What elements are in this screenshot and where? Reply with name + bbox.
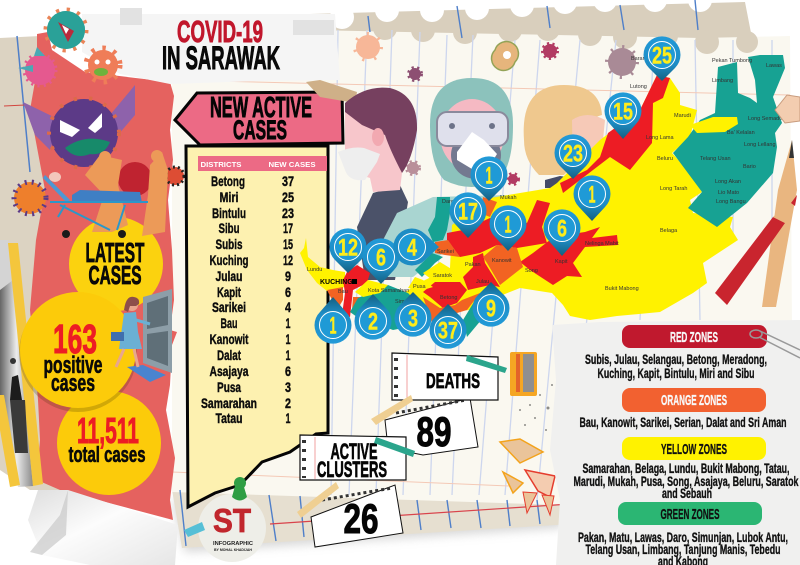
illustration: health worker in goggles xyxy=(383,78,525,277)
positive cases badge: 163 xyxy=(53,316,97,362)
pin: Betong 37: 37 xyxy=(438,318,458,344)
pin: Bau 1: 1 xyxy=(330,312,336,340)
district rows: 1 xyxy=(286,331,291,347)
map place labels: Bario xyxy=(743,164,756,170)
map place labels: Long Akan xyxy=(715,179,741,185)
title: COVID-19 xyxy=(177,14,263,49)
icon: safety pin xyxy=(750,330,800,358)
district rows: Sarikei xyxy=(212,299,246,315)
icon: pencils xyxy=(715,140,797,307)
district rows: Dalat xyxy=(217,347,241,363)
legend: yellow zones xyxy=(574,437,799,501)
district rows: 4 xyxy=(285,299,291,315)
icon: faint viruses on notebook xyxy=(356,35,636,184)
illustration: masked man xyxy=(338,88,417,280)
pin: Pusa 3 xyxy=(394,292,432,337)
pin: Samarahan 2: 2 xyxy=(368,308,378,336)
map place labels: Lawas xyxy=(766,63,782,69)
map place labels: Kapit xyxy=(555,259,568,265)
pin: Subis 15 xyxy=(604,92,642,139)
legend: red zones xyxy=(585,325,767,381)
pin: Sarikei 4: 4 xyxy=(407,234,417,262)
logo: ST infographic badge: ST xyxy=(213,502,251,539)
district rows: Asajaya xyxy=(210,363,249,379)
legend: orange zones xyxy=(580,388,786,430)
logo: ST infographic badge: INFOGRAPHIC xyxy=(213,541,253,547)
district rows: 6 xyxy=(285,363,291,379)
pin: Bintulu 23: 23 xyxy=(563,140,583,168)
map place labels: Mukah xyxy=(500,195,517,201)
pin: Pusa 3: 3 xyxy=(408,306,418,332)
logo: ST infographic badge: BY MOHAL KHADIJAH xyxy=(214,548,252,552)
map place labels: Lundu xyxy=(307,267,322,273)
zone: Lundu xyxy=(300,238,345,291)
map place labels: Telang Usan xyxy=(700,156,731,162)
district rows: 6 xyxy=(285,284,291,300)
legend: yellow zones: YELLOW ZONES xyxy=(661,441,727,458)
pin: Bau 1 xyxy=(314,297,351,344)
district rows: Sibu xyxy=(218,220,240,236)
district rows: Bau xyxy=(220,315,238,331)
panel: deaths note: 89 xyxy=(416,408,452,455)
map place labels: Long Lama xyxy=(646,135,674,141)
map place labels: Daro xyxy=(442,199,454,205)
location pins xyxy=(314,36,680,349)
district rows: 12 xyxy=(283,252,293,268)
pin: Julau 9: 9 xyxy=(486,296,496,322)
total cases badge: total cases xyxy=(68,442,146,467)
zone: orange regions xyxy=(327,197,523,323)
pin: Miri 25: 25 xyxy=(652,42,672,70)
map place labels: Pakan xyxy=(465,262,481,268)
latest cases badge xyxy=(69,217,163,311)
district rows: 37 xyxy=(282,173,294,189)
pin: Kapit 6: 6 xyxy=(557,216,567,242)
pin: Asajaya 6 xyxy=(362,238,400,284)
pin: Bintulu 23 xyxy=(554,134,592,179)
icon: woman at door xyxy=(111,289,172,382)
pin: Sibu 17: 17 xyxy=(458,198,478,226)
logo: ST infographic badge xyxy=(184,477,266,562)
district rows: 25 xyxy=(282,189,294,205)
district rows: 17 xyxy=(283,220,293,236)
pin: Betong 37 xyxy=(430,304,466,349)
red torn paper xyxy=(30,32,177,520)
map place labels: Belaga xyxy=(660,228,678,234)
pin: Kapit 6 xyxy=(544,209,580,256)
banner: new active cases: NEW ACTIVE xyxy=(210,92,312,124)
district rows: Pusa xyxy=(217,379,241,395)
district rows: 23 xyxy=(282,205,294,221)
district rows: Kuching xyxy=(210,252,248,268)
banner: new active cases: CASES xyxy=(233,115,287,145)
icon: stretcher with health workers xyxy=(43,150,168,238)
panel: deaths note xyxy=(371,353,507,455)
tape on banner xyxy=(306,80,357,103)
map place labels: Lio Mato xyxy=(718,190,739,196)
icon: virus illustrations xyxy=(14,11,184,214)
district rows: Subis xyxy=(216,236,243,252)
icon: pencil shavings xyxy=(500,95,800,515)
map place labels: Nelinga Mabit xyxy=(585,241,619,247)
cutter knife xyxy=(0,240,43,487)
map place labels: Song xyxy=(525,268,538,274)
map place labels: Sarikei xyxy=(437,249,454,255)
district rows: 3 xyxy=(285,379,291,395)
map place labels: Long Lellang xyxy=(744,142,776,148)
pin: Subis 15: 15 xyxy=(613,98,633,126)
district rows: Miri xyxy=(220,189,238,205)
pin: Kanowit 1: 1 xyxy=(504,212,512,238)
map place labels: Pekan Tumbong xyxy=(712,58,752,64)
map place labels: Kota Samarahan xyxy=(368,288,409,294)
latest cases badge: LATEST xyxy=(86,237,144,268)
icon: pencil sharpener xyxy=(510,352,537,396)
zone: teal east xyxy=(673,55,785,227)
panel: district table xyxy=(186,146,328,507)
district rows: Bintulu xyxy=(212,205,246,221)
pin: Sibu 17 xyxy=(450,192,487,238)
panel: active clusters note xyxy=(297,435,415,547)
latest cases badge: CASES xyxy=(88,260,142,290)
table header: NEW CASES xyxy=(268,160,316,169)
map place labels: Betong xyxy=(440,295,457,301)
zone: teal west xyxy=(350,197,487,337)
panel: active clusters note: ACTIVE xyxy=(330,439,378,464)
map place labels: Pusa xyxy=(413,284,426,290)
legend: green zones: GREEN ZONES xyxy=(660,506,720,523)
panel: active clusters note: 26 xyxy=(344,495,378,542)
map place labels: Bau xyxy=(338,289,348,295)
table header: DISTRICTS xyxy=(200,160,242,169)
map place labels: Long Semado xyxy=(748,116,782,122)
map place labels: Saratok xyxy=(433,273,452,279)
legend: orange zones: ORANGE ZONES xyxy=(661,392,727,409)
district rows: Kanowit xyxy=(210,331,249,347)
table header xyxy=(198,156,327,171)
map place labels: KUCHING xyxy=(320,279,353,286)
pin: Sarikei 4 xyxy=(393,229,439,266)
positive cases badge: positive xyxy=(44,352,102,379)
district rows: 15 xyxy=(283,236,293,252)
zone: yellow coast details xyxy=(355,257,473,297)
pin: Kuching 12 xyxy=(330,228,366,273)
district rows: 1 xyxy=(286,315,291,331)
legend: red zones: RED ZONES xyxy=(670,329,718,346)
total cases badge: 11,511 xyxy=(77,410,139,451)
paper curl bottom left xyxy=(28,490,178,565)
map place labels: Lutong xyxy=(630,84,647,90)
pin: Samarahan 2 xyxy=(355,294,392,340)
district rows xyxy=(201,173,294,426)
map place labels: Bukit Mabong xyxy=(605,286,639,292)
pin: Asajaya 6: 6 xyxy=(376,244,386,272)
panel: torn zone legend paper xyxy=(550,320,800,565)
district rows: Kapit xyxy=(217,284,241,300)
title strip xyxy=(82,8,340,84)
pin: Kanowit 1 xyxy=(490,205,526,251)
legend: yellow zones: and Sebauh xyxy=(662,486,712,501)
map place labels: Julau xyxy=(476,279,489,285)
positive cases badge: cases xyxy=(51,370,95,397)
panel: deaths note: DEATHS xyxy=(426,370,480,393)
pin: Miri 25 xyxy=(644,36,680,81)
map place labels: Beluru xyxy=(657,156,673,162)
map of Sarawak xyxy=(300,55,785,337)
banner: new active cases xyxy=(175,92,343,145)
illustration: blonde woman xyxy=(524,85,605,188)
district rows: 1 xyxy=(286,347,291,363)
map place labels: Limbang xyxy=(712,78,733,84)
pin: Tatau 1: 1 xyxy=(588,182,596,208)
map place labels: Marudi xyxy=(674,113,691,119)
zone: red regions xyxy=(342,75,670,317)
map place labels: Baram xyxy=(631,56,648,62)
district rows: Betong xyxy=(211,173,245,189)
map place labels: Ba' Kelalan xyxy=(727,130,755,136)
pin: Julau 9 xyxy=(473,282,510,327)
map place labels: Kanowit xyxy=(492,258,512,264)
map place labels: Simunjan xyxy=(395,299,418,305)
district rows: Julau xyxy=(216,268,242,284)
legend: green zones xyxy=(578,502,788,565)
title xyxy=(162,14,280,76)
district rows: 2 xyxy=(285,395,291,411)
district rows: 1 xyxy=(286,410,291,426)
district rows: Samarahan xyxy=(201,395,257,411)
title: IN SARAWAK xyxy=(162,40,280,76)
district rows: 9 xyxy=(285,268,291,284)
zone: yellow regions xyxy=(400,75,738,320)
pin: Dalat 1: 1 xyxy=(486,162,492,190)
icon: green push pin xyxy=(232,477,247,500)
map place labels: Long Tarah xyxy=(660,186,687,192)
district rows: Tatau xyxy=(216,410,242,426)
total cases badge xyxy=(57,391,161,495)
map place labels: Long Bangu xyxy=(716,199,746,205)
pin: Kuching 12: 12 xyxy=(338,234,358,262)
pin: Tatau 1 xyxy=(574,175,610,221)
map place labels xyxy=(307,56,782,305)
panel: active clusters note: CLUSTERS xyxy=(317,457,387,482)
positive cases badge xyxy=(19,292,137,412)
pin: Dalat 1 xyxy=(470,156,508,201)
